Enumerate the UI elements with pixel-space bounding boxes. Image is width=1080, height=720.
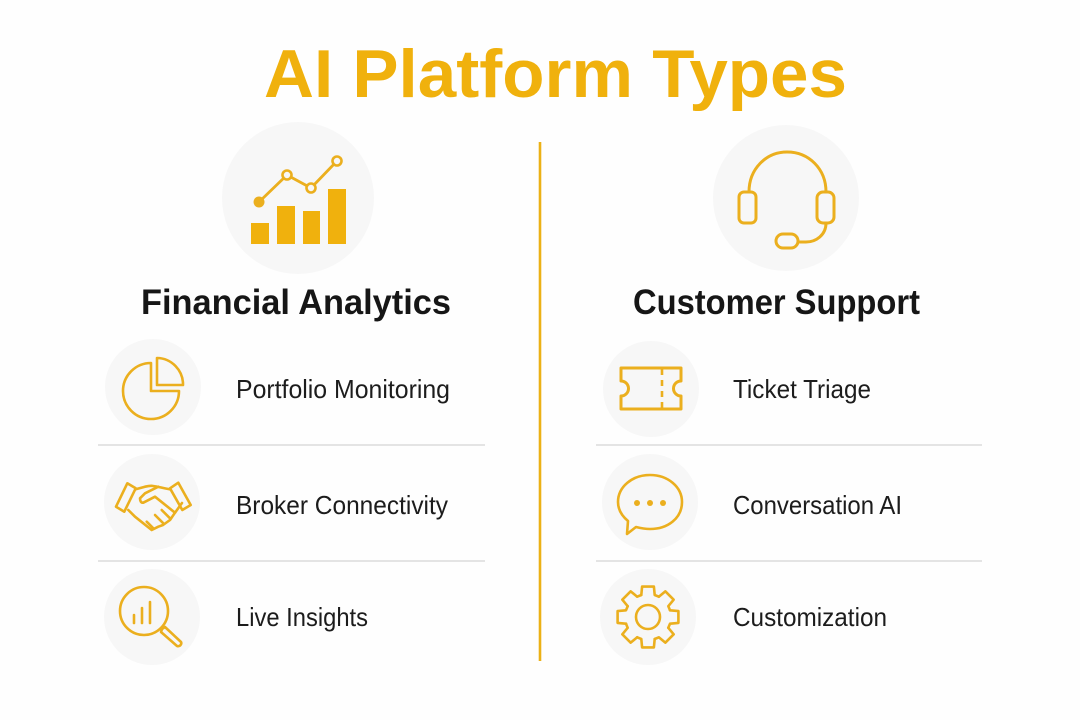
icon: gear (600, 569, 696, 665)
row: broker connectivity (104, 454, 448, 550)
icon: handshake (104, 454, 200, 550)
icon: magnifier with bars (104, 569, 200, 665)
icon: bar chart with trend line (222, 122, 374, 274)
label: live insights: Live Insights (236, 602, 368, 632)
row: ticket triage (603, 341, 871, 437)
row: customization (600, 569, 887, 665)
label: customization: Customization (733, 602, 887, 632)
row: live insights (104, 569, 368, 665)
title: AI Platform Types (264, 36, 847, 112)
row: portfolio monitoring (105, 339, 450, 435)
label: ticket triage: Ticket Triage (733, 374, 871, 404)
row: conversation ai (602, 454, 902, 550)
icon: headset (713, 125, 859, 271)
label: conversation ai: Conversation AI (733, 490, 902, 520)
panel: financial analytics (104, 122, 451, 665)
center divider (539, 142, 541, 661)
label: broker connectivity: Broker Connectivity (236, 490, 448, 520)
panel: customer support (600, 125, 920, 665)
icon: pie chart (105, 339, 201, 435)
heading: customer support: Customer Support (633, 283, 920, 322)
icon: ticket (603, 341, 699, 437)
icon: chat bubble (602, 454, 698, 550)
heading: financial analytics: Financial Analytics (141, 283, 451, 322)
label: portfolio monitoring: Portfolio Monitoring (236, 374, 450, 404)
